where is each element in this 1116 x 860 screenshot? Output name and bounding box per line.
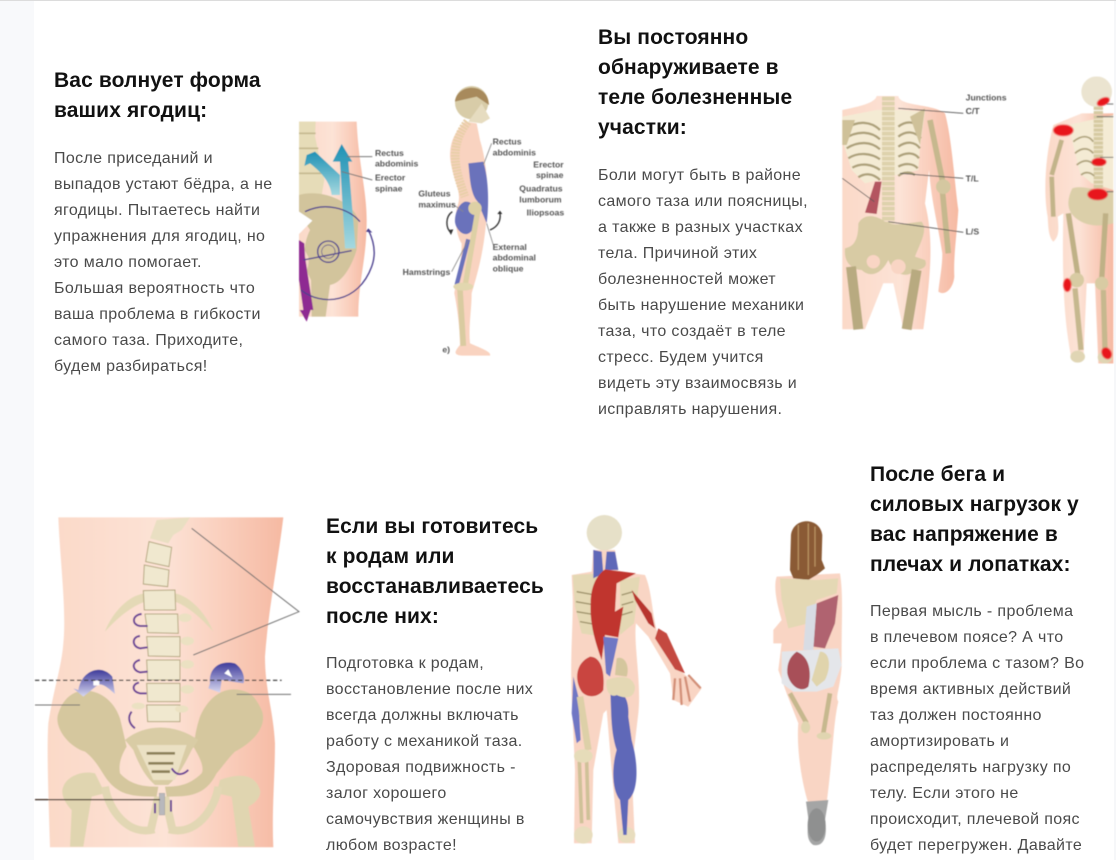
heading: childbirth: после них: — [326, 605, 439, 628]
illustration: torso skeleton with junctions: L/S — [966, 227, 979, 237]
panel: glutes — [54, 69, 564, 375]
text block: shoulders: время активных действий — [870, 681, 1071, 698]
illustration: standing skeleton side view: abdominis — [493, 147, 536, 157]
heading: shoulders: вас напряжение в — [870, 523, 1058, 546]
illustration: standing skeleton side view: External — [493, 242, 527, 252]
illustration: torso skeleton with junctions — [842, 93, 1007, 329]
illustration: running woman figure — [773, 521, 842, 845]
text block: childbirth: работу с механикой таза. — [326, 733, 523, 750]
text block: glutes: ягодицы. Пытаетесь найти — [54, 202, 260, 219]
heading: glutes: ваших ягодиц: — [54, 99, 207, 122]
text block: glutes: самого таза. Приходите, — [54, 332, 243, 349]
text block: shoulders: если проблема с тазом? Во — [870, 655, 1084, 672]
illustration: standing skeleton side view: lumborum — [519, 194, 562, 204]
illustration: standing skeleton side view: maximus — [418, 199, 456, 209]
heading: painful areas: теле болезненные — [598, 86, 792, 109]
heading: painful areas: Вы постоянно — [598, 26, 748, 49]
text block: glutes: упражнения для ягодиц, но — [54, 228, 265, 245]
illustration: standing skeleton side view — [403, 86, 564, 356]
illustration: pelvis side view with arrows — [299, 122, 418, 322]
text block: childbirth — [326, 655, 533, 854]
text block: painful areas: самого таза или поясницы, — [598, 193, 808, 210]
text block: glutes: это мало помогает. — [54, 254, 202, 271]
heading: painful areas: обнаруживаете в — [598, 56, 779, 79]
panel: shoulders — [571, 463, 1084, 854]
text block: shoulders: Первая мысль - проблема — [870, 603, 1073, 620]
text block: painful areas: тела. Причиной этих — [598, 245, 757, 262]
illustration: pelvis side view with arrows: Erector — [375, 173, 406, 183]
text block: childbirth: Подготовка к родам, — [326, 655, 484, 672]
illustration: torso skeleton with junctions: T/L — [966, 173, 979, 183]
text block: painful areas: видеть эту взаимосвязь и — [598, 375, 797, 392]
text block: painful areas — [598, 167, 808, 418]
text block: painful areas: исправлять нарушения. — [598, 401, 782, 418]
heading: shoulders: После бега и — [870, 463, 1005, 486]
illustration: standing skeleton side view: oblique — [493, 263, 524, 273]
text block: shoulders: таз должен постоянно — [870, 707, 1042, 724]
text block: shoulders: будет перегружен. Давайте — [870, 837, 1082, 854]
heading: glutes — [54, 69, 261, 122]
text block: painful areas: таза, что создаёт в теле — [598, 323, 786, 340]
heading: shoulders: плечах и лопатках: — [870, 553, 1071, 576]
illustration: standing skeleton side view: abdominal — [493, 253, 536, 263]
heading: glutes: Вас волнует форма — [54, 69, 261, 92]
illustration: back muscles figure — [571, 515, 702, 844]
heading: shoulders: силовых нагрузок у — [870, 493, 1079, 516]
text block: glutes: Большая вероятность что — [54, 280, 255, 297]
illustration: standing skeleton side view: Hamstrings — [403, 267, 450, 277]
text block: childbirth: любом возрасте! — [326, 837, 457, 854]
illustration: pelvis side view with arrows: abdominis — [375, 159, 418, 169]
text block: glutes: После приседаний и — [54, 150, 213, 167]
illustration: torso skeleton with junctions: Junctions — [966, 93, 1007, 103]
illustration: standing skeleton side view: e) — [442, 345, 450, 355]
text block: shoulders: телу. Если этого не — [870, 785, 1019, 802]
heading: childbirth: Если вы готовитесь — [326, 515, 538, 538]
heading: childbirth: к родам или — [326, 545, 455, 568]
text block: painful areas: стресс. Будем учится — [598, 349, 764, 366]
illustration: pelvis side view with arrows: Rectus — [375, 148, 404, 158]
illustration: standing skeleton side view: Quadratus — [519, 184, 563, 194]
illustration: standing skeleton side view: spinae — [536, 170, 564, 180]
text block: childbirth: Здоровая подвижность - — [326, 759, 516, 776]
illustration: standing skeleton side view: Rectus — [493, 137, 522, 147]
text block: childbirth: залог хорошего — [326, 785, 447, 802]
panel: childbirth — [35, 515, 544, 854]
text block: painful areas: а также в разных участках — [598, 219, 803, 236]
text block: glutes: будем разбираться! — [54, 358, 208, 375]
heading: shoulders — [870, 463, 1079, 576]
heading: childbirth: восстанавливаетесь — [326, 575, 544, 598]
illustration: standing skeleton side view: Erector — [533, 159, 564, 169]
illustration: front view of pelvis and lumbar spine — [35, 517, 299, 847]
text block: glutes — [54, 150, 273, 375]
text block: glutes: выпадов устают бёдра, а не — [54, 176, 273, 193]
text block: shoulders: происходит, плечевой пояс — [870, 811, 1080, 828]
text block: shoulders: распределять нагрузку по — [870, 759, 1071, 776]
illustration: pelvis side view with arrows: spinae — [375, 183, 403, 193]
illustration: standing skeleton side view: Gluteus — [418, 189, 451, 199]
text block: shoulders: амортизировать и — [870, 733, 1009, 750]
text block: painful areas: быть нарушение механики — [598, 297, 804, 314]
illustration: back skeleton with pain zones — [1045, 76, 1114, 363]
heading: painful areas — [598, 26, 792, 139]
text block: childbirth: восстановление после них — [326, 681, 533, 698]
text block: painful areas: Боли могут быть в районе — [598, 167, 801, 184]
text block: painful areas: болезненностей может — [598, 271, 776, 288]
panel: painful areas — [598, 26, 1114, 418]
text block: childbirth: самочувствия женщины в — [326, 811, 525, 828]
text block: shoulders — [870, 603, 1084, 854]
illustration: torso skeleton with junctions: C/T — [966, 106, 980, 116]
illustration: standing skeleton side view: Iliopsoas — [527, 208, 564, 218]
text block: glutes: ваша проблема в гибкости — [54, 306, 261, 323]
heading: painful areas: участки: — [598, 116, 687, 139]
text block: childbirth: всегда должны включать — [326, 707, 519, 724]
text block: shoulders: в плечевом поясе? А что — [870, 629, 1063, 646]
heading: childbirth — [326, 515, 544, 628]
